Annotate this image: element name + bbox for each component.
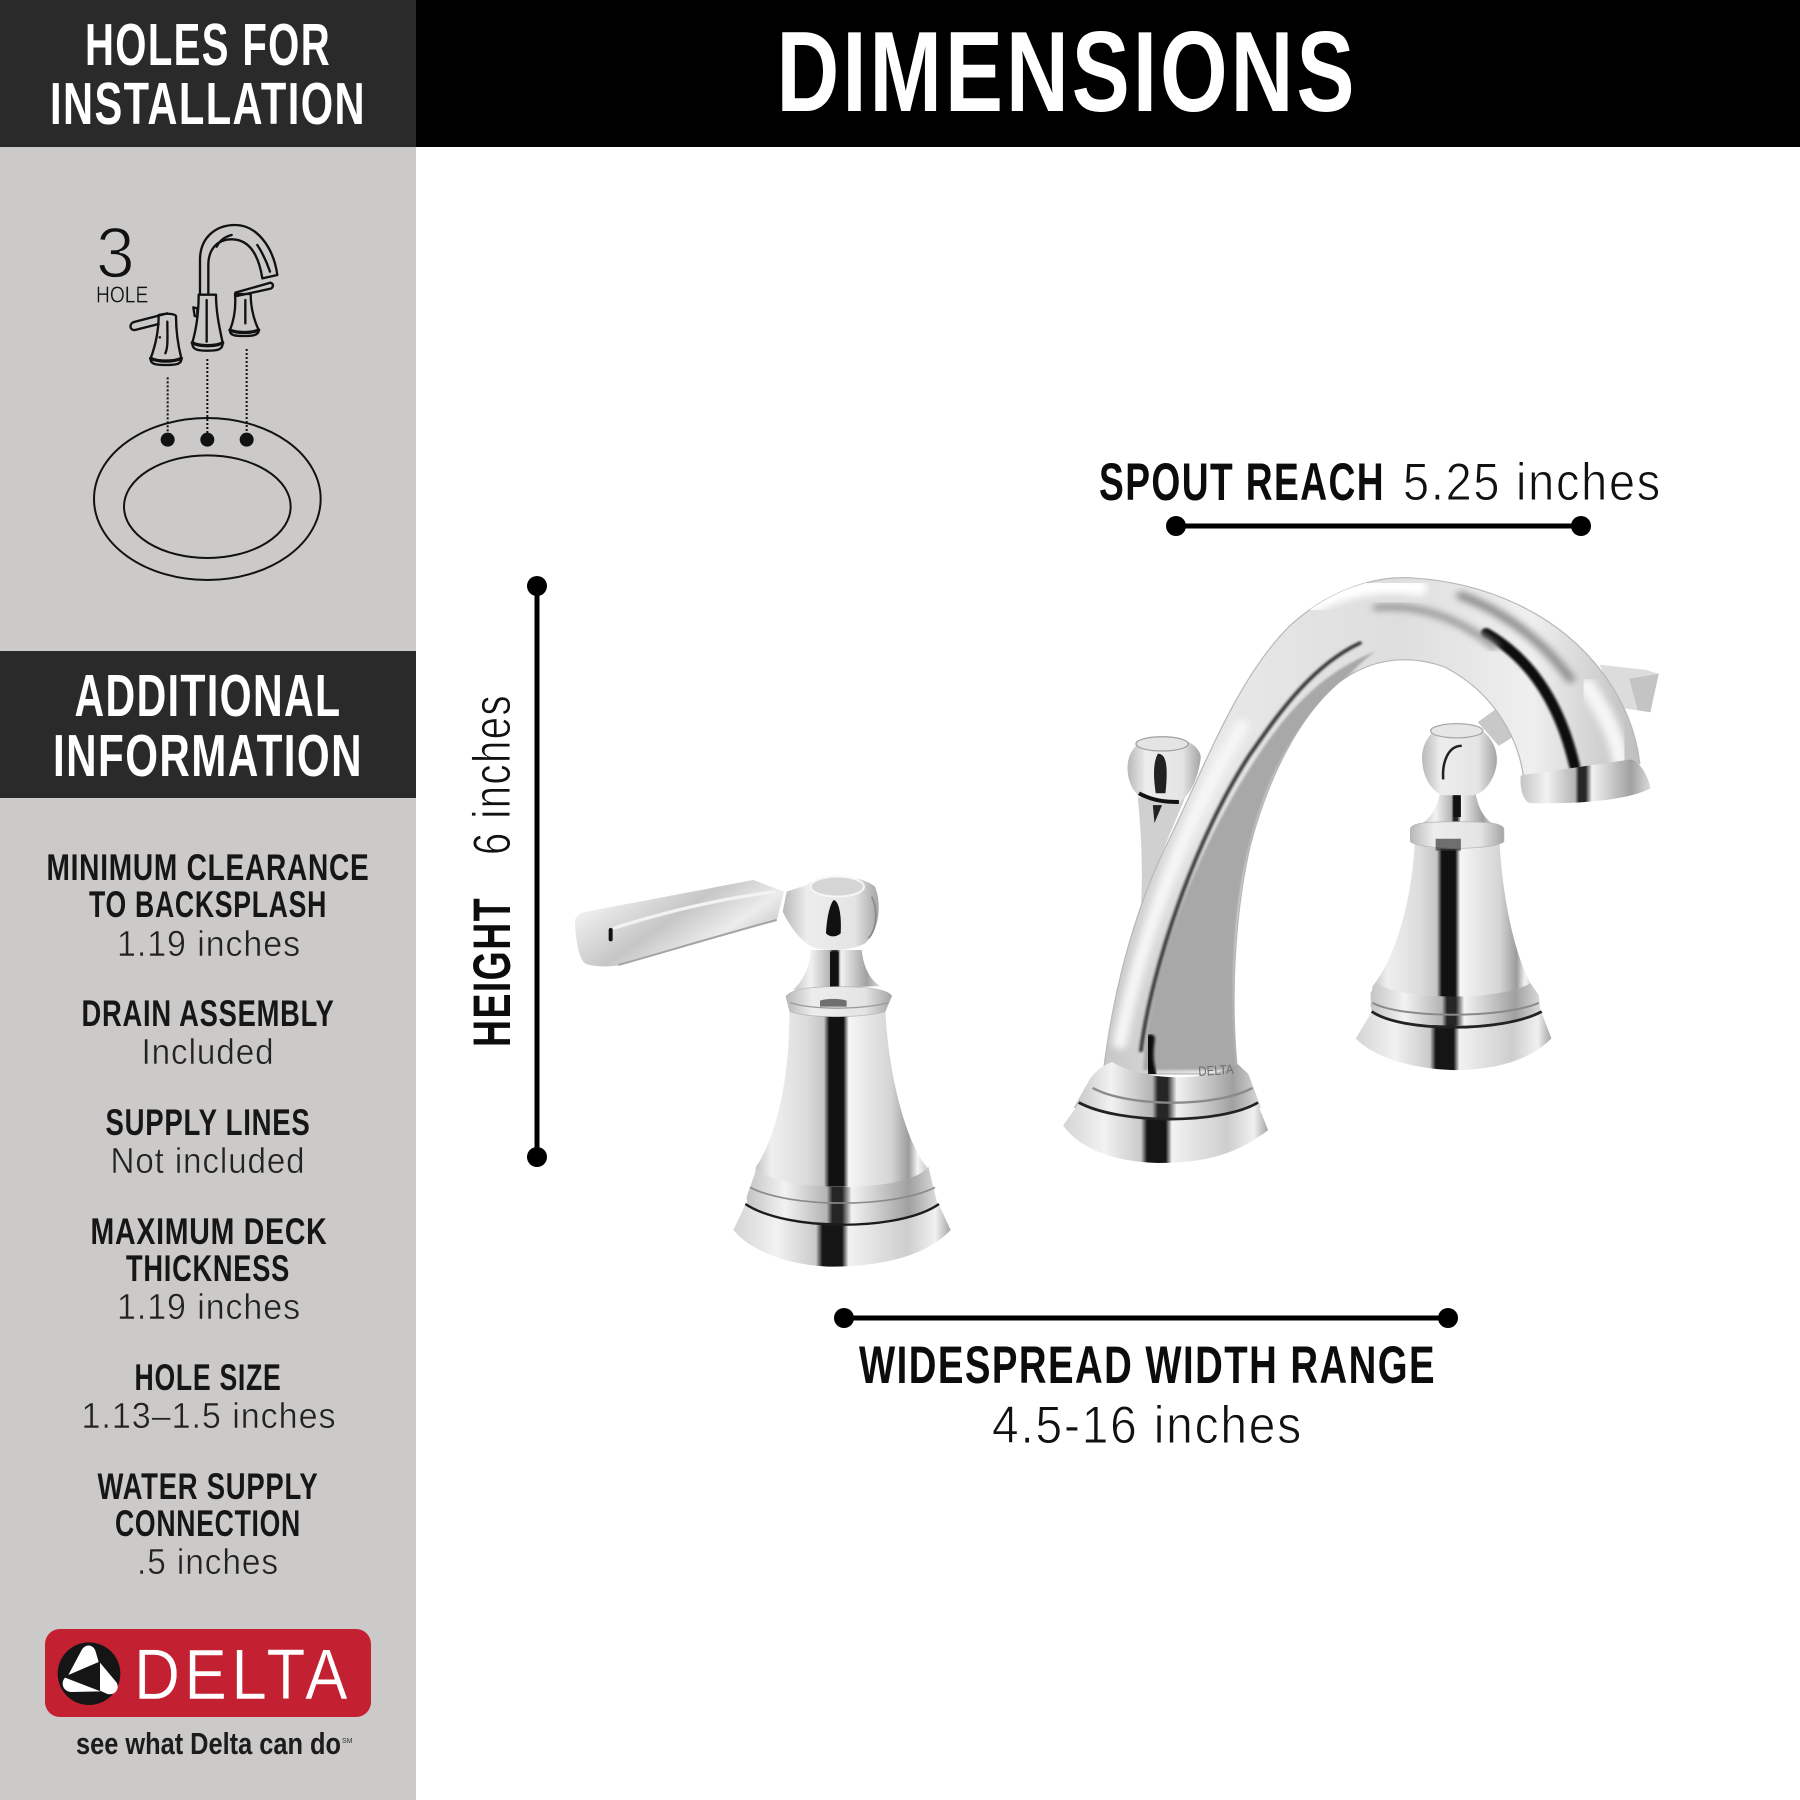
header: additional information: ADDITIONAL xyxy=(74,663,342,729)
spec: maximum deck thickness: THICKNESS xyxy=(126,1248,290,1289)
spec: hole size: 1.13–1.5 inches xyxy=(82,1395,336,1436)
height value: 6 inches xyxy=(463,694,522,855)
dotted drop lines xyxy=(168,349,247,433)
spec: supply lines xyxy=(106,1102,310,1181)
spec: water supply connection: CONNECTION xyxy=(115,1503,301,1544)
product: left handle xyxy=(575,877,951,1267)
main base xyxy=(1063,1061,1268,1163)
spout reach value: 5.25 inches xyxy=(1403,453,1662,512)
header: holes for installation: HOLES FOR xyxy=(85,12,331,78)
title: dimensions: DIMENSIONS xyxy=(776,9,1358,136)
spec: minimum clearance: TO BACKSPLASH xyxy=(89,884,327,925)
spec: minimum clearance: 1.19 inches xyxy=(117,923,301,964)
dimension: spout reach xyxy=(1099,453,1662,536)
spout nozzle xyxy=(1520,760,1650,803)
spout reach line xyxy=(1166,516,1591,536)
panel: grey sidebar xyxy=(0,0,416,1800)
left handle stem behind spout xyxy=(1128,736,1201,904)
sink basin xyxy=(94,418,321,580)
spec: hole size xyxy=(82,1357,336,1436)
spec: drain assembly: Included xyxy=(142,1031,274,1072)
icon: delta emblem xyxy=(58,1642,120,1705)
base xyxy=(733,1203,951,1267)
mounting holes xyxy=(161,433,254,447)
spec: water supply connection: WATER SUPPLY xyxy=(98,1466,318,1507)
spec: supply lines: Not included xyxy=(110,1140,306,1181)
spec: minimum clearance: MINIMUM CLEARANCE xyxy=(46,847,370,888)
spec: supply lines: SUPPLY LINES xyxy=(106,1102,310,1143)
neck xyxy=(793,950,880,990)
spec: water supply connection: .5 inches xyxy=(137,1541,279,1582)
knob xyxy=(783,877,879,950)
spec: maximum deck thickness: MAXIMUM DECK xyxy=(90,1211,328,1252)
spout shading xyxy=(1120,585,1621,1082)
hole label: HOLE xyxy=(96,281,148,307)
faucet line drawing xyxy=(130,225,277,365)
spec: minimum clearance xyxy=(46,847,370,964)
tagline: SM xyxy=(342,1738,353,1745)
header: holes for installation xyxy=(0,0,416,147)
header: holes for installation: INSTALLATION xyxy=(50,71,366,137)
bell body xyxy=(753,1010,930,1187)
spec: maximum deck thickness xyxy=(90,1211,328,1327)
sink bowl xyxy=(124,455,291,558)
spout reach label: SPOUT REACH xyxy=(1099,453,1385,512)
dimension: height xyxy=(463,576,547,1167)
icon: three hole faucet and sink xyxy=(94,213,321,580)
title: dimensions xyxy=(416,0,1800,147)
width label: WIDESPREAD WIDTH RANGE xyxy=(859,1336,1436,1395)
spec: drain assembly: DRAIN ASSEMBLY xyxy=(82,993,334,1034)
width line xyxy=(834,1308,1458,1328)
logo wordmark: DELTA xyxy=(134,1636,352,1715)
lever xyxy=(575,880,784,966)
dimension: widespread width range xyxy=(834,1308,1458,1455)
right handle xyxy=(1356,723,1551,1070)
product: spout and right handle xyxy=(1063,578,1659,1163)
spec: drain assembly xyxy=(82,993,334,1072)
collar xyxy=(786,987,892,1017)
far lever behind spout xyxy=(1478,665,1659,746)
spout tube xyxy=(1103,578,1640,1074)
header: additional information xyxy=(0,651,416,798)
main base: DELTA xyxy=(1198,1061,1235,1079)
height label: HEIGHT xyxy=(463,897,522,1047)
spec: water supply connection xyxy=(98,1466,318,1582)
tagline: see what Delta can do xyxy=(76,1726,341,1761)
hole count: 3 xyxy=(96,213,135,293)
ring xyxy=(747,1167,937,1230)
header: additional information: INFORMATION xyxy=(53,723,363,789)
width value: 4.5-16 inches xyxy=(992,1396,1303,1455)
spec: hole size: HOLE SIZE xyxy=(134,1357,282,1398)
height line xyxy=(527,576,547,1167)
logo: delta xyxy=(45,1629,371,1717)
spec: maximum deck thickness: 1.19 inches xyxy=(117,1286,301,1327)
